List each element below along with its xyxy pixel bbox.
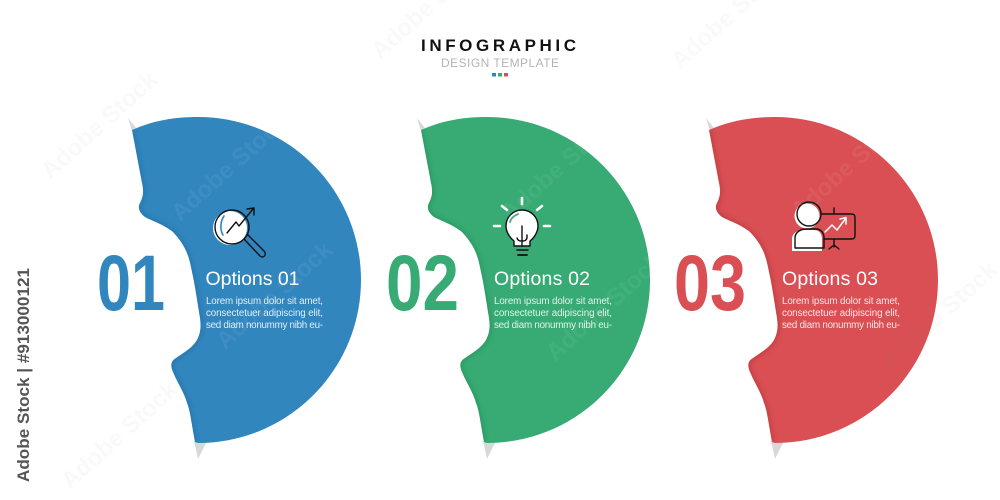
inner edge shadow — [709, 130, 778, 442]
description: Lorem ipsum dolor sit amet, — [494, 296, 612, 307]
description: Lorem ipsum dolor sit amet, — [782, 296, 900, 307]
inner edge shadow — [132, 130, 201, 442]
heading: Options 01 — [206, 268, 300, 290]
title dots — [492, 73, 508, 76]
title: INFOGRAPHIC — [421, 36, 576, 55]
number 01: 01 — [97, 238, 165, 327]
icon: presenter with chart board — [792, 202, 855, 251]
watermark: stock marks: Adobe Stock — [786, 106, 914, 224]
panel: option 02 — [386, 117, 650, 459]
red half circle — [709, 117, 938, 443]
subtitle: DESIGN TEMPLATE — [441, 56, 559, 70]
number 02: 02 — [386, 238, 459, 327]
description: sed diam nonummy nibh eu- — [494, 320, 612, 331]
watermark: stock marks: Adobe Stock — [541, 248, 669, 366]
panel: option 01 — [97, 117, 361, 459]
green half circle — [421, 117, 650, 443]
description: consectetuer adipiscing elit, — [494, 308, 612, 319]
description: consectetuer adipiscing elit, — [782, 308, 900, 319]
description: sed diam nonummy nibh eu- — [206, 320, 323, 331]
watermark: stock marks: Adobe Stock — [876, 256, 1000, 374]
vertical stock id: Adobe Stock | #913000121 — [14, 268, 33, 482]
folded tips — [417, 118, 496, 459]
inner edge shadow — [421, 130, 490, 442]
watermark: stock marks: Adobe Stock — [496, 108, 624, 226]
description — [494, 296, 612, 331]
watermark: stock marks: Adobe Stock — [36, 66, 164, 184]
number 03: 03 — [674, 238, 746, 327]
description: sed diam nonummy nibh eu- — [782, 320, 900, 331]
heading: Options 03 — [782, 268, 878, 290]
icon: light bulb — [494, 198, 550, 255]
watermark: stock marks: Adobe Stock — [211, 236, 339, 354]
icon: magnifier with rising chart — [213, 208, 265, 257]
folded tips — [706, 118, 784, 459]
folded tips — [128, 118, 207, 459]
description — [782, 296, 900, 331]
heading: Options 02 — [494, 268, 590, 290]
description: Lorem ipsum dolor sit amet, — [206, 296, 323, 307]
description — [206, 296, 323, 331]
panel: option 03 — [674, 117, 938, 459]
blue half circle — [132, 117, 361, 443]
watermark: stock marks: Adobe Stock — [56, 376, 184, 494]
description: consectetuer adipiscing elit, — [206, 308, 323, 319]
watermark: stock marks: Adobe Stock — [166, 108, 294, 226]
